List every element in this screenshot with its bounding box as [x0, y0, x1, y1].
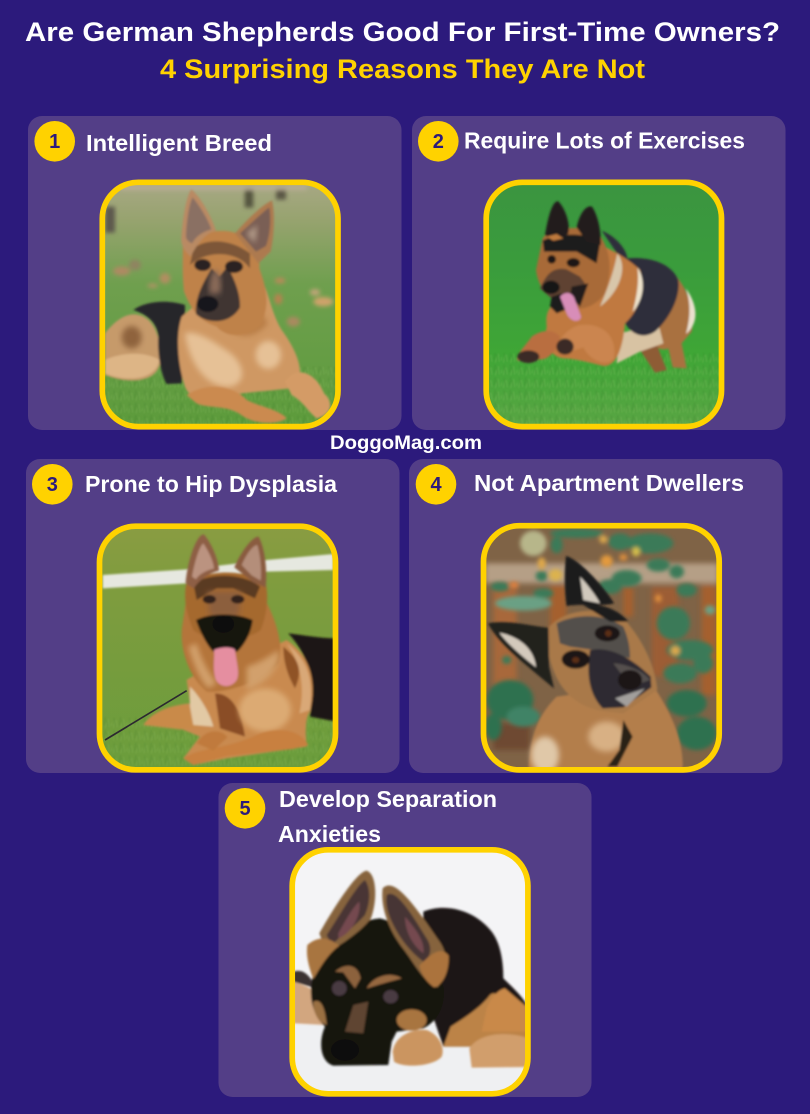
photo: German Shepherd with tongue out [97, 523, 338, 773]
number badge 5 [225, 788, 265, 829]
heading 2: Require Lots of Exercises [464, 128, 745, 154]
panel 2: Require Lots of Exercises [412, 116, 786, 430]
image frame 1 [102, 182, 338, 427]
number badge 4: 4 [430, 474, 442, 496]
panel 3: Prone to Hip Dysplasia [26, 459, 400, 773]
image frame 4 [484, 526, 719, 770]
heading 3: Prone to Hip Dysplasia [85, 471, 337, 497]
image frame 2 [486, 182, 722, 427]
heading 5: Anxieties [278, 821, 381, 847]
image frame 5 [292, 850, 528, 1094]
panel 5: Develop Separation Anxieties [218, 783, 592, 1097]
heading 4: Not Apartment Dwellers [474, 470, 744, 496]
number badge 3: 3 [47, 474, 58, 496]
number badge 4 [416, 464, 456, 505]
title: Are German Shepherds Good For First-Time Owners? [25, 17, 780, 47]
number badge 1 [34, 121, 75, 162]
photo: German Shepherd running [483, 180, 723, 428]
number badge 2: 2 [433, 131, 444, 153]
subtitle: 4 Surprising Reasons They Are Not [160, 54, 645, 84]
heading 5: Develop Separation [279, 786, 497, 812]
heading 1: Intelligent Breed [86, 130, 272, 156]
image frame 3 [100, 526, 336, 770]
panel 4: Not Apartment Dwellers [409, 459, 782, 773]
photo: German Shepherd puppy [289, 847, 531, 1097]
photo: German Shepherd lying on grass [100, 180, 340, 428]
panel 1: Intelligent Breed [28, 116, 402, 430]
number badge 1: 1 [49, 131, 60, 153]
heading 5 [278, 786, 497, 847]
number badge 3 [32, 464, 73, 505]
number badge 2 [418, 121, 459, 162]
photo: German Shepherd tilting head [481, 523, 722, 773]
number badge 5: 5 [239, 798, 251, 820]
brand label: DoggoMag.com [330, 433, 482, 454]
